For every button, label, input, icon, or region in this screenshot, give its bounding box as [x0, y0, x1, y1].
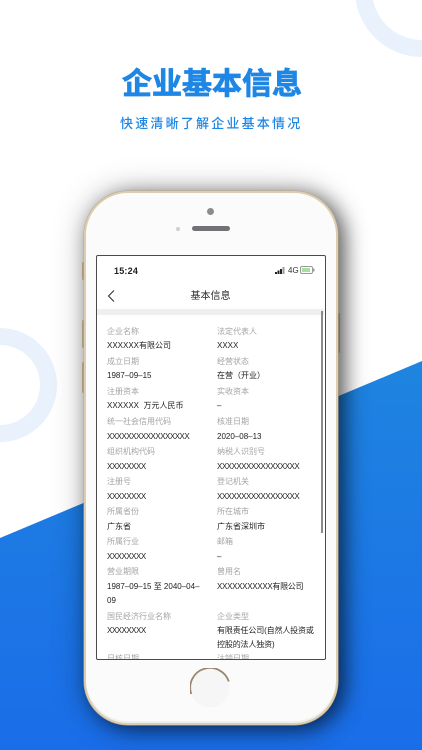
company info fields: 企业名称	[107, 327, 139, 336]
status bar signal icon	[275, 267, 284, 274]
sensor dot	[176, 227, 180, 231]
company info fields: 经营状态	[217, 357, 249, 366]
decorative ring left	[0, 328, 57, 442]
subtitle: 快速清晰了解企业基本情况	[120, 116, 302, 131]
status bar time: 15:24	[114, 266, 138, 276]
home button	[190, 668, 230, 694]
phone side button	[337, 313, 340, 353]
phone body	[84, 191, 338, 725]
company info fields: 统一社会信用代码	[107, 417, 171, 426]
company info fields: XXXXXX 万元人民币	[107, 401, 183, 410]
title: 企业基本信息	[122, 68, 302, 101]
company info fields: XXXXXXXX	[107, 552, 146, 561]
company info fields: 邮箱	[217, 537, 233, 546]
back arrow	[108, 290, 114, 302]
company info fields: 成立日期	[107, 357, 139, 366]
company info fields: XXXXXXXXXXX有限公司	[217, 582, 303, 591]
company info fields: XXXXXX有限公司	[107, 341, 171, 350]
company info fields: 登记机关	[217, 477, 249, 486]
company info fields: 企业类型	[217, 612, 249, 621]
company info fields: 组织机构代码	[107, 447, 155, 456]
company info fields: 所在城市	[217, 507, 249, 516]
company info fields: 纳税人识别号	[217, 447, 265, 456]
company info fields: 在营（开业）	[217, 371, 265, 380]
company info fields: 广东省深圳市	[217, 522, 265, 531]
company info fields: XXXXXXXX	[107, 462, 146, 471]
company info fields	[107, 327, 314, 660]
phone mute button	[82, 262, 85, 280]
scrollbar	[321, 311, 323, 533]
company info fields: XXXX	[217, 341, 238, 350]
company info fields: 所属行业	[107, 537, 139, 546]
camera	[207, 208, 214, 215]
page heading: 基本信息	[190, 291, 230, 302]
company info fields: 国民经济行业名称	[107, 612, 171, 621]
phone screen	[96, 255, 326, 660]
company info fields: 1987–09–15	[107, 371, 152, 380]
company info fields: –	[217, 401, 221, 410]
speaker	[192, 226, 230, 231]
company info fields: XXXXXXXXXXXXXXXXX	[217, 462, 299, 471]
company info fields: 控股的法人独资)	[217, 640, 274, 649]
company info fields: 实收资本	[217, 387, 249, 396]
company info fields: XXXXXXXXXXXXXXXXX	[107, 432, 189, 441]
phone volume down button	[82, 362, 85, 393]
company info fields: –	[217, 552, 221, 561]
phone volume up button	[82, 320, 85, 348]
header divider band	[97, 309, 324, 315]
company info fields: 营业期限	[107, 567, 139, 576]
company info fields: 1987–09–15 至 2040–04–	[107, 582, 200, 591]
company info fields: 09	[107, 596, 116, 605]
company info fields: 注册资本	[107, 387, 139, 396]
company info fields: XXXXXXXX	[107, 626, 146, 635]
company info fields: XXXXXXXXXXXXXXXXX	[217, 492, 299, 501]
company info fields: 曾用名	[217, 567, 241, 576]
company info fields: 2020–08–13	[217, 432, 262, 441]
battery icon	[300, 266, 314, 274]
company info fields: 有限责任公司(自然人投资或	[217, 626, 314, 635]
company info fields: 核准日期	[217, 417, 249, 426]
company info fields: XXXXXXXX	[107, 492, 146, 501]
status bar network: 4G	[288, 266, 299, 275]
decorative ring top right	[355, 0, 422, 57]
company info fields: 注册号	[107, 477, 131, 486]
company info fields: 所属省份	[107, 507, 139, 516]
company info fields: 法定代表人	[217, 327, 257, 336]
company info fields: 广东省	[107, 522, 131, 531]
